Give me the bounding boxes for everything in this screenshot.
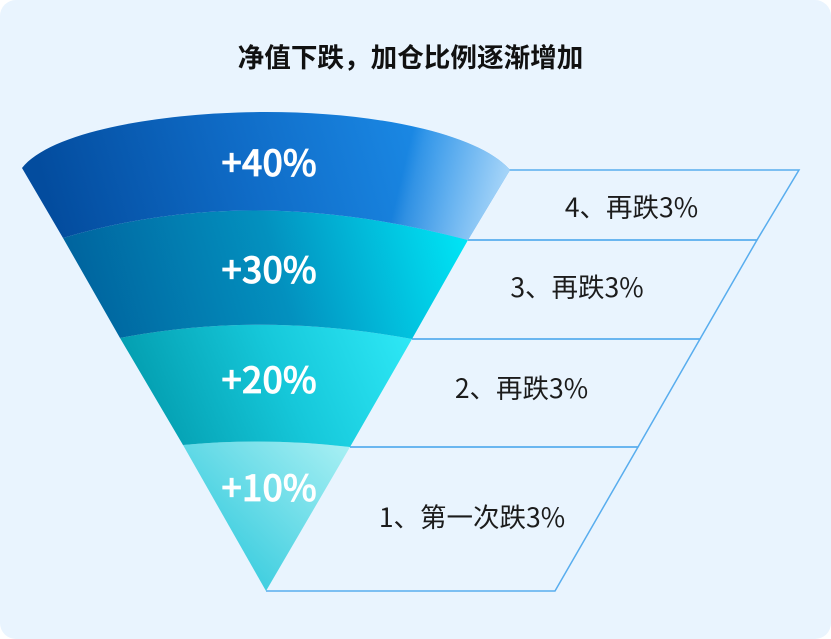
percent: 10: +10%: [221, 460, 317, 512]
funnel highlight: [22, 112, 510, 240]
label: step 4: 4、再跌3%: [565, 186, 698, 225]
step outline: 1: [266, 447, 638, 591]
step labels: [379, 186, 698, 535]
label: step 3: 3、再跌3%: [510, 266, 644, 305]
funnel layer: +20%: [120, 325, 412, 447]
funnel layer: +30%: [63, 210, 468, 339]
percent: 20: +20%: [221, 352, 317, 404]
funnel: [22, 112, 510, 591]
step outline: 2: [350, 339, 700, 447]
funnel percentages: [221, 135, 317, 512]
funnel layer: +40%: [22, 112, 510, 240]
percent: 30: +30%: [221, 242, 317, 294]
label: step 1: 1、第一次跌3%: [379, 496, 565, 535]
title: 净值下跌，加仓比例逐渐增加: [238, 36, 583, 75]
label: step 2: 2、再跌3%: [455, 367, 588, 406]
funnel layer: +10%: [183, 441, 350, 591]
right step outlines: [266, 170, 799, 591]
step outline: 4: [468, 170, 799, 240]
percent: 40: +40%: [221, 135, 317, 187]
step outline: 3: [412, 240, 757, 339]
